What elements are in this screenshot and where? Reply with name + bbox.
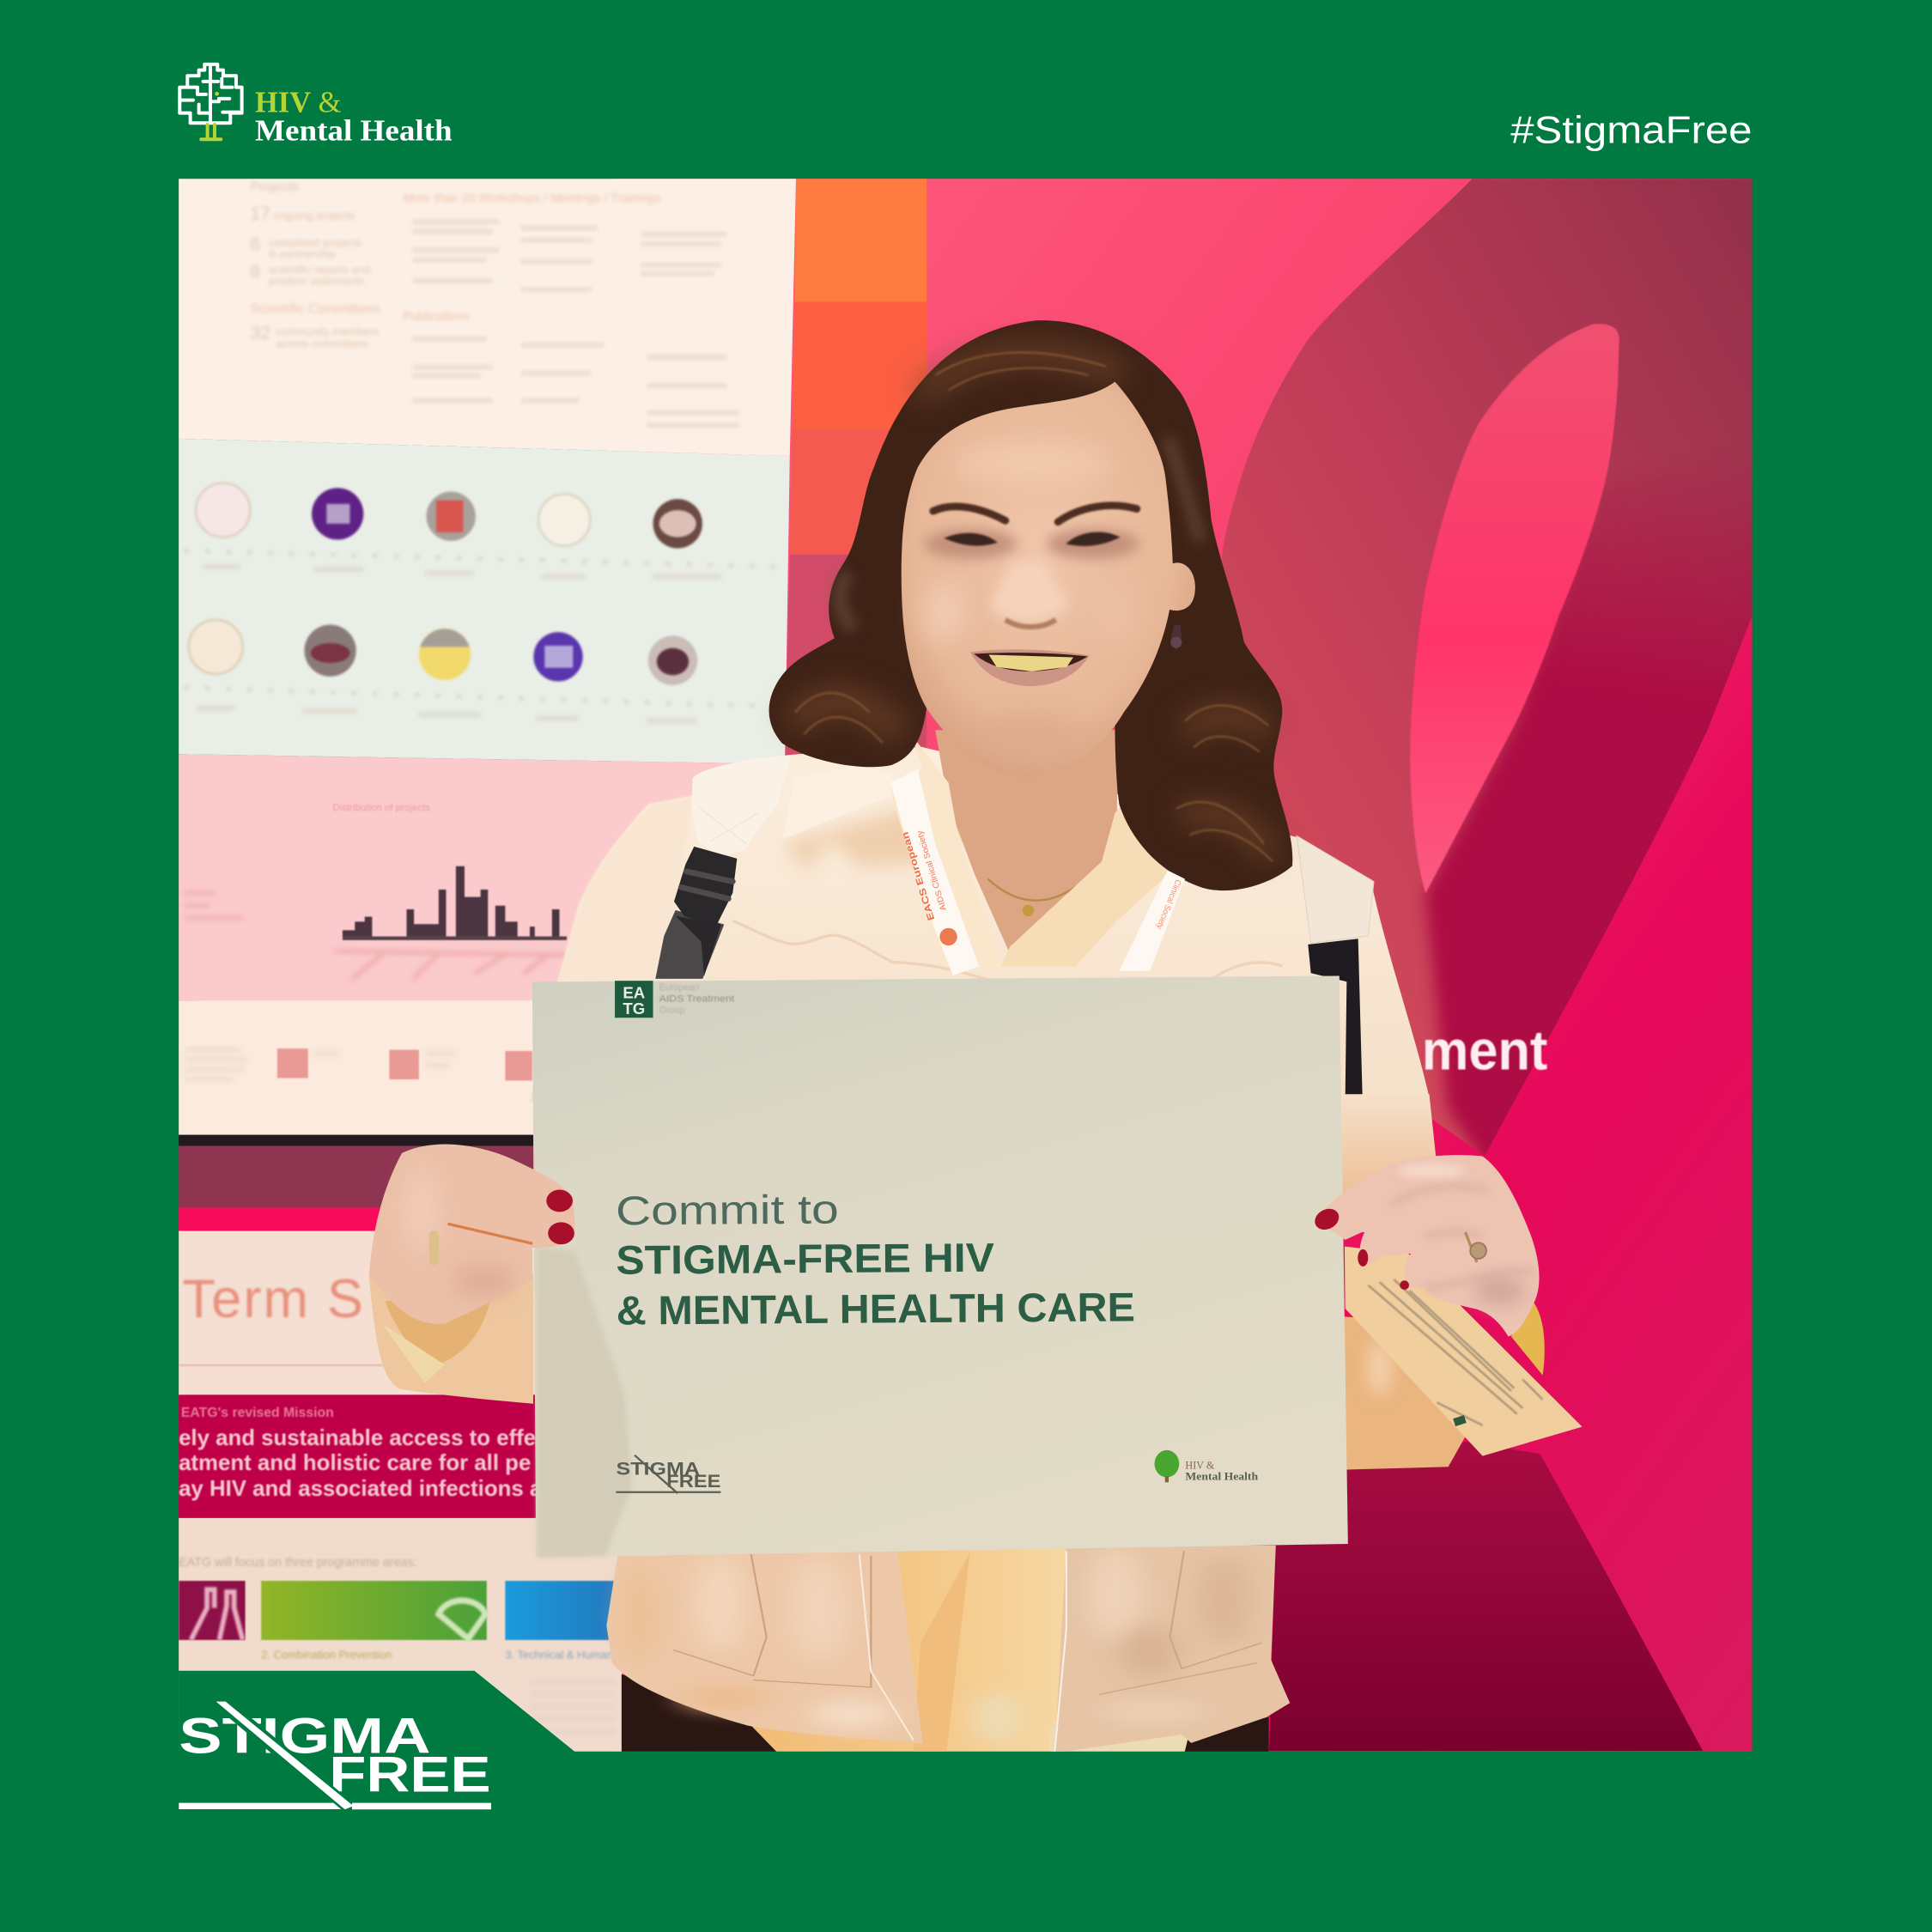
nails [1311,1205,1343,1234]
poster: statistics text: community members [276,325,379,337]
logo: HIV & Mental Health [179,64,453,148]
poster: statistics text: completed projects [269,236,361,249]
EATG mark: EA [623,983,645,1001]
backpack padding left [691,756,790,856]
poster: statistics text: More than 20 Workshops / Meetings / Trainings [403,191,660,205]
pen in hand [448,1224,532,1243]
teeth [988,654,1073,671]
poster: statistics text [250,179,739,425]
logo word: FREE: FREE [329,1747,491,1803]
person: lower jacket, shirt and pants [606,1546,1290,1754]
poster: statistics text: Projects [250,179,299,194]
poster: statistics text: position statements [269,274,364,287]
poster: statistics text: across committees [276,337,368,350]
hashtag: #StigmaFree [1510,109,1752,151]
shirt hem right [1049,1726,1188,1752]
hair strands [795,352,1273,861]
small Stigma Free logo on sign [616,1455,720,1493]
EATG mark: Group [659,1005,685,1016]
poster: statistics text: ongoing projects [274,209,355,222]
person: upper jacket [529,747,1429,1154]
person: forearm tone right of board [1342,1094,1437,1232]
collar shadow [784,805,979,870]
buckle [674,847,737,927]
poster: mission text: ay HIV and associated infections a [179,1477,543,1501]
corner notch [179,1671,575,1752]
person: right sleeve [1342,1299,1545,1470]
person: left hand [369,1145,575,1324]
icon: brain tree [179,64,242,139]
baseline rule [179,1803,491,1809]
poster: QR codes [185,1048,532,1080]
banner text fragment: ment [1422,1020,1547,1082]
poster: statistics text: Scientific Committees [250,301,380,316]
face [902,382,1195,778]
backdrop: orange colour stripe [784,179,927,788]
nails [546,1190,573,1212]
collar left [891,734,1001,967]
backdrop: ribbon [1220,179,1774,1751]
card logo [1453,1415,1467,1426]
person: left sleeve [369,1273,533,1404]
person: head, neck and collar [769,320,1292,975]
poster: programme area tiles: 3. Technical & Human [505,1648,613,1661]
smile [970,649,1090,686]
poster: statistics text: 17 [250,203,270,223]
sign text: STIGMA-FREE HIV [616,1236,995,1284]
small Stigma Free logo on sign: FREE [666,1471,720,1492]
eyebrows [933,506,1137,522]
poster: statistics text: 8 [250,261,260,282]
jacket left front [606,1546,923,1744]
earring [1171,625,1182,651]
backpack strap left [655,910,724,979]
logo text: Mental Health: Mental Health [255,115,453,148]
jacket right front [1054,1546,1290,1753]
poster: statistics text: 6 [250,234,260,254]
ring [1466,1232,1477,1262]
sign text [616,1185,1135,1334]
EATG mark: European [659,983,699,993]
person: right hand [1311,1155,1540,1337]
logo text: HIV &: HIV & [255,87,342,119]
poster: mission text: ely and sustainable access to effec [179,1426,548,1450]
person: head, neck and collar: AIDS Clinical Society [915,829,949,912]
collar right [1001,802,1185,967]
person: head, neck and collar: Clinical Society [1154,878,1182,931]
jacket seam [732,921,996,981]
poster: skyline bar chart: Distribution of projects [332,803,430,813]
finger shadows [1391,1187,1534,1288]
small Stigma Free logo on sign: STIGMA [616,1459,700,1479]
small HIV logo on sign: Mental Health [1185,1469,1258,1482]
poster: mission text: EATG's revised Mission [181,1406,334,1420]
poster: mission text: atment and holistic care for all pe [179,1451,531,1475]
lanyard left [890,769,979,975]
EATG mark [615,981,734,1018]
paper card in right hand [1345,1247,1583,1456]
small HIV logo on sign: HIV & [1185,1459,1215,1471]
sign board [532,975,1348,1558]
timeline dotted rules [185,550,782,720]
poster: Term S heading: Term S [182,1269,365,1329]
person: head, neck and collar: EACS European [900,830,937,921]
sign text: Commit to [616,1188,839,1234]
nose [991,559,1069,622]
ribbon inner loop [1410,324,1619,893]
backpack padding right [1297,835,1374,943]
ribbon lower right shade [1419,490,1752,1156]
poster: timeline circles [185,483,782,720]
poster: background bands [179,179,796,1752]
backdrop: pink wall [616,179,1752,1752]
jacket sleeve tone [558,796,693,981]
poster: programme area tiles [179,1556,614,1660]
backpack strap right [1308,939,1363,1097]
poster: programme area tiles: 2. Combination Prevention [261,1648,392,1661]
slash [216,1700,354,1809]
logo: Stigma Free [179,1700,491,1809]
hair highlights [795,354,1273,857]
EATG mark: AIDS Treatment [659,994,734,1005]
poster: statistics text: 32 [250,323,270,343]
logo word: STIGMA: STIGMA [179,1709,431,1765]
EATG mark: TG [623,999,645,1018]
forehead light and cheeks [953,446,1110,480]
eyes [944,532,1121,546]
eye sockets [924,529,1017,559]
hair mass [769,320,1292,890]
shadow on board [538,1247,632,1558]
poster: statistics text: in partnership [269,247,336,260]
neck [935,730,1117,953]
pants [622,1674,1269,1754]
ring [429,1230,439,1266]
ribbon lower band [1269,1442,1703,1751]
photo panel [179,179,1774,1754]
lanyard right [1120,870,1185,971]
poster: statistics text: scientific reports and [269,264,370,276]
shirt [749,1546,1069,1754]
card text lines [1368,1279,1543,1425]
poster: skyline bar chart [185,803,567,980]
poster: statistics text: Publications [403,310,469,324]
sign text: & MENTAL HEALTH CARE [617,1285,1135,1334]
small HIV logo on sign [1155,1450,1258,1482]
poster: mission text [179,1406,548,1501]
poster: programme area tiles: EATG will focus on three programme areas: [179,1556,417,1570]
